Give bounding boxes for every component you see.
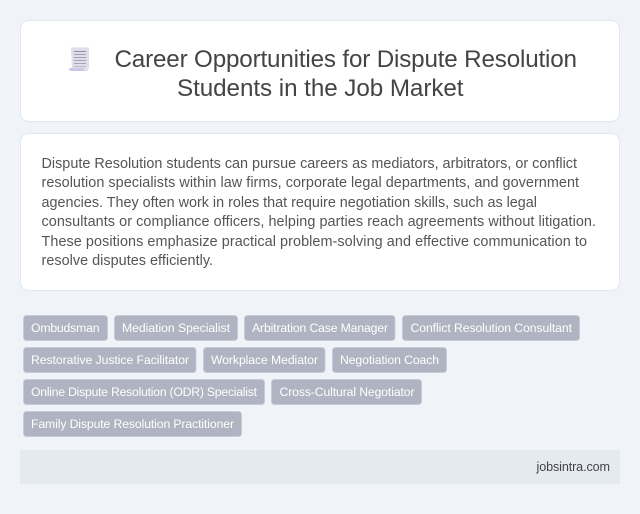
tag: Online Dispute Resolution (ODR) Specialist: Online Dispute Resolution (ODR) Specialist (31, 385, 258, 399)
tag: Workplace Mediator: Workplace Mediator (211, 353, 318, 367)
tag: Mediation Specialist: Mediation Specialist (122, 321, 231, 335)
footer (20, 450, 620, 484)
description text: resolve disputes efficiently. (42, 253, 213, 269)
tag: Family Dispute Resolution Practitioner (24, 412, 242, 436)
tag: Restorative Justice Facilitator: Restorative Justice Facilitator (31, 353, 189, 367)
tag: Ombudsman: Ombudsman (31, 321, 100, 335)
tag: Conflict Resolution Consultant (402, 316, 580, 340)
tag: Workplace Mediator (204, 348, 325, 372)
description text: These positions emphasize practical problem-solving and effective communication to (42, 234, 587, 250)
footer source text: jobsintra.com (536, 460, 610, 474)
description text: agencies. They often work in roles that require negotiation skills, such as legal (42, 195, 537, 211)
tag: Negotiation Coach: Negotiation Coach (340, 353, 439, 367)
tag: Family Dispute Resolution Practitioner: Family Dispute Resolution Practitioner (31, 417, 234, 431)
tag: Ombudsman (24, 316, 108, 340)
tag: Arbitration Case Manager (244, 316, 395, 340)
tag: Restorative Justice Facilitator (24, 348, 196, 372)
title: Career Opportunities for Dispute Resolution (114, 46, 577, 73)
tag: Cross-Cultural Negotiator: Cross-Cultural Negotiator (280, 385, 414, 399)
tag: Negotiation Coach (332, 348, 446, 372)
tag group (24, 316, 580, 436)
description text: resolution specialists within law firms, corporate legal departments, and government (42, 175, 579, 191)
description text: consultants or compliance officers, helping parties reach agreements without litigation. (42, 214, 596, 230)
tag: Conflict Resolution Consultant: Conflict Resolution Consultant (410, 321, 573, 335)
tag: Online Dispute Resolution (ODR) Specialist (24, 380, 264, 404)
panel: description (20, 134, 620, 290)
panel: header (20, 20, 620, 122)
description text (42, 156, 596, 269)
tag: Cross-Cultural Negotiator (272, 380, 422, 404)
tag: Mediation Specialist (114, 316, 238, 340)
description text: Dispute Resolution students can pursue careers as mediators, arbitrators, or conflict (42, 156, 577, 172)
title: Students in the Job Market (177, 75, 464, 102)
tag: Arbitration Case Manager: Arbitration Case Manager (252, 321, 388, 335)
icon: paper scroll (69, 47, 89, 71)
title (114, 46, 577, 102)
